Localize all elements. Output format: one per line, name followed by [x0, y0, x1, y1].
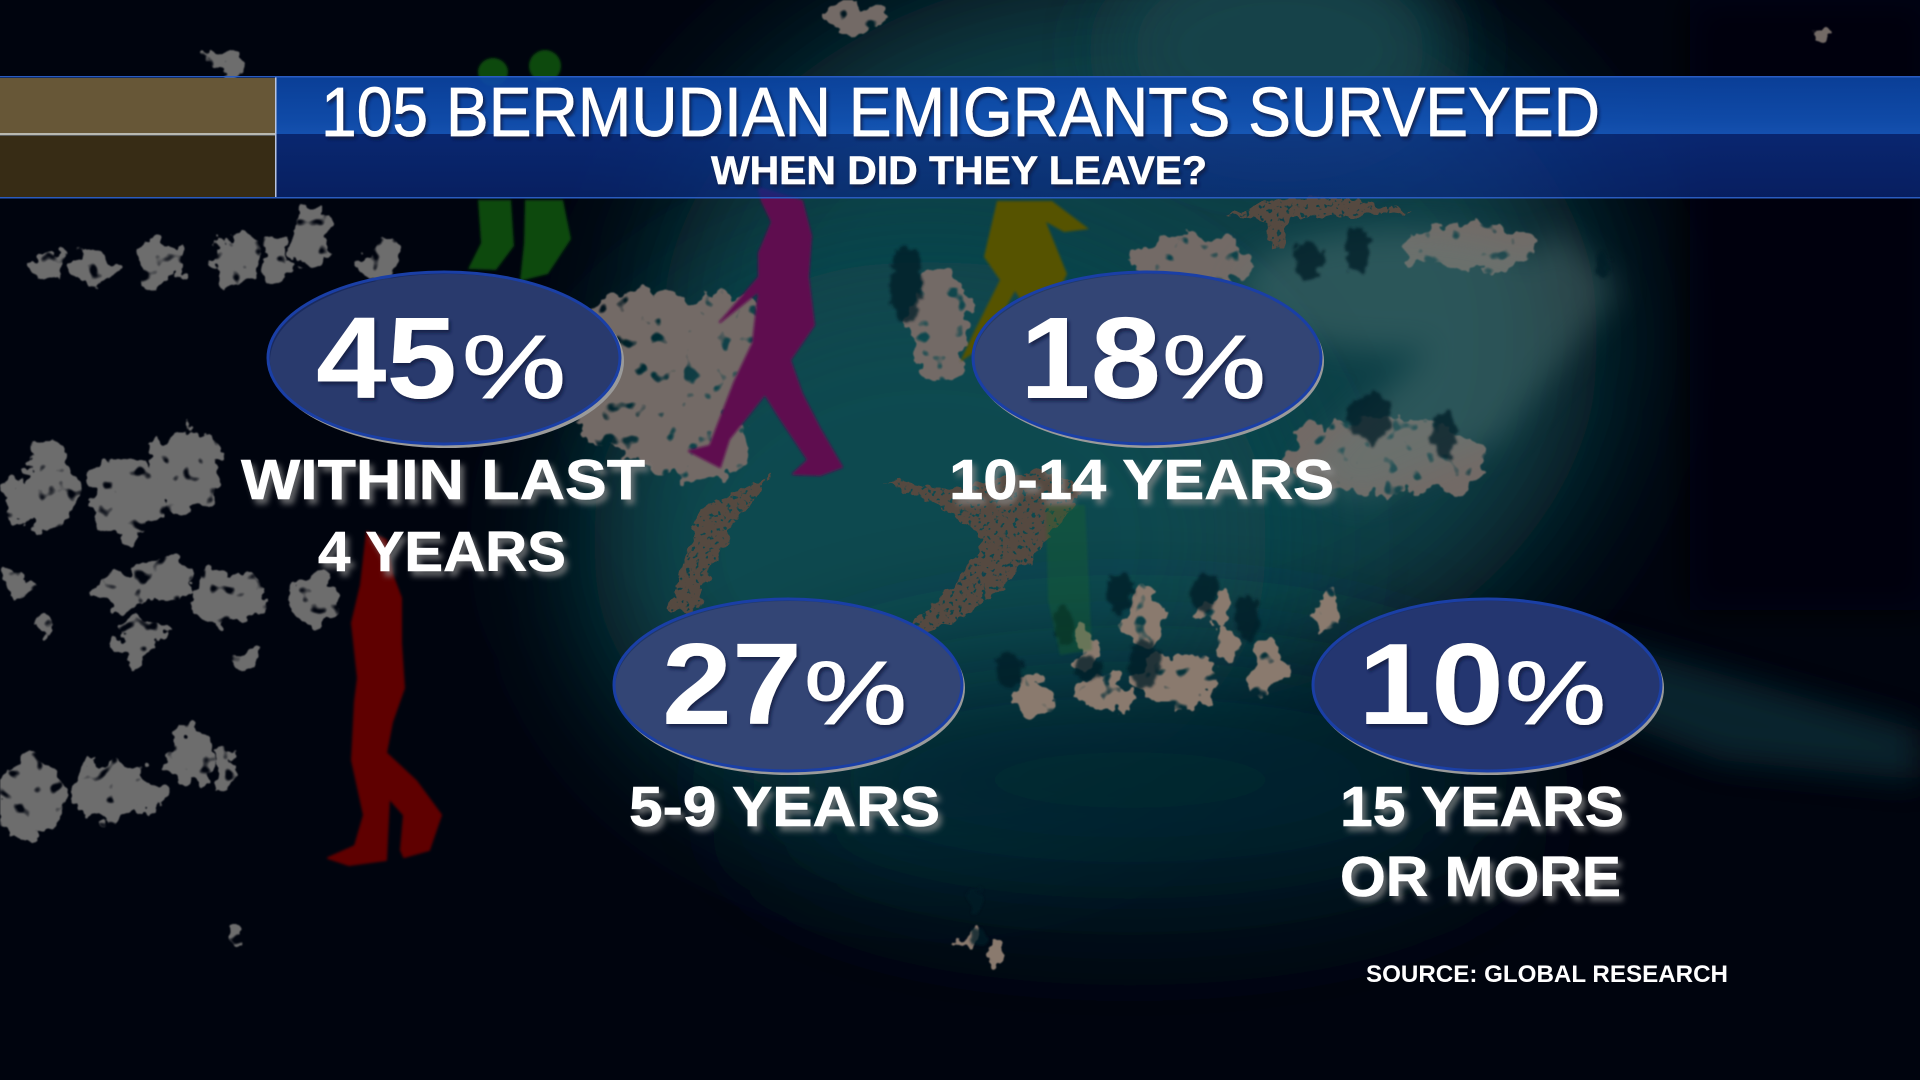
- stat: 10% 15 years or more: [1313, 599, 1664, 909]
- teal ocean glow: [590, 0, 1920, 900]
- stat: 18% 10-14 years: [949, 272, 1334, 512]
- percentage value: %: [462, 318, 566, 418]
- percentage value: %: [1505, 644, 1606, 744]
- oval badge: [973, 272, 1324, 448]
- label: 15 YEARS: [1340, 775, 1624, 839]
- percentage value: %: [1162, 318, 1266, 418]
- header: dark blue subtitle band: [275, 134, 1920, 198]
- header: tan block: [0, 78, 275, 133]
- subtitle: WHEN DID THEY LEAVE?: [711, 149, 1207, 193]
- label: WITHIN LAST: [241, 448, 645, 512]
- label: 5-9 YEARS: [629, 775, 940, 839]
- label: OR MORE: [1340, 845, 1621, 909]
- clouds: pale eastern haze: [1240, 230, 1620, 500]
- oval badge: [1313, 599, 1664, 775]
- label: 4 YEARS: [318, 520, 566, 584]
- clouds: grey scattered west: [0, 50, 398, 950]
- title: 105 BERMUDIAN EMIGRANTS SURVEYED: [321, 73, 1600, 151]
- islands of Bermuda: [668, 198, 1412, 640]
- figure: red walking silhouette: [328, 532, 441, 865]
- header: dark brown block: [0, 136, 275, 197]
- header: blue title band: [275, 77, 1920, 134]
- oval badge: [268, 272, 624, 448]
- clouds: central and eastern: [555, 4, 1837, 493]
- header bar: [0, 73, 1920, 198]
- oval badge: [614, 599, 965, 775]
- stat: 27% 5-9 years: [614, 599, 965, 839]
- percentage value: 45: [316, 293, 457, 423]
- clouds: south-east cluster: [959, 592, 1339, 965]
- percentage value: 27: [662, 619, 802, 749]
- dark cloud shadows: [890, 226, 1610, 946]
- label: 10-14 YEARS: [949, 448, 1334, 512]
- figure: faint green silhouette: [1046, 505, 1092, 655]
- source note: SOURCE: GLOBAL RESEARCH: [1366, 961, 1728, 988]
- figure: yellow silhouette: [960, 201, 1089, 362]
- figure: green pair of silhouettes: [468, 50, 571, 281]
- stat: 45% within last 4 years: [241, 272, 645, 584]
- percentage value: %: [804, 644, 907, 744]
- percentage value: 18: [1020, 293, 1161, 423]
- percentage value: 10: [1358, 619, 1504, 749]
- figure: magenta walking silhouette: [689, 188, 842, 475]
